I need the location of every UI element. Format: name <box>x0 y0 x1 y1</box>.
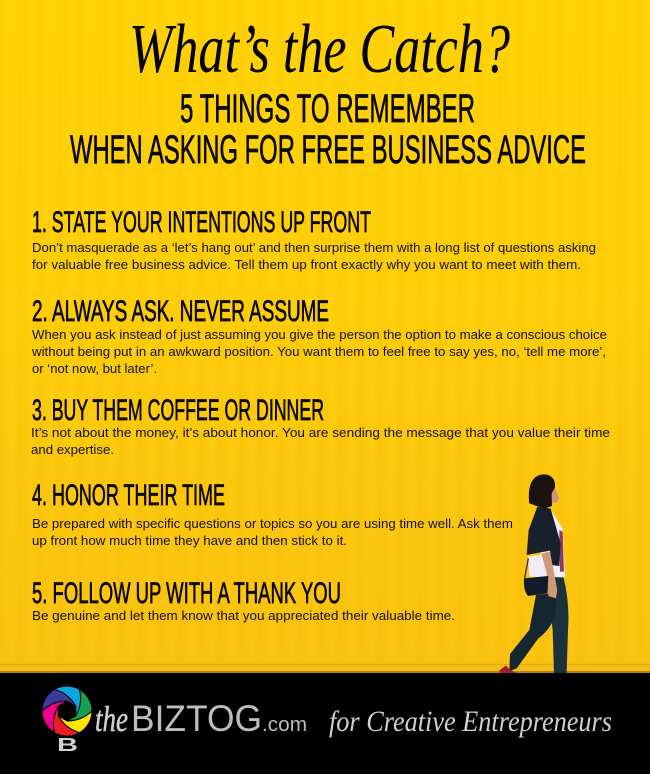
tip 3: and expertise. <box>31 442 114 457</box>
tip 1: 1. STATE YOUR INTENTIONS UP FRONT <box>32 206 371 239</box>
brand name: BIZTOG <box>131 698 262 739</box>
subtitle <box>70 87 586 172</box>
woman walking photo <box>499 474 568 673</box>
tip 1: for valuable free business advice. Tell them up front exactly why you want to meet with them. <box>32 257 581 272</box>
tip 2: 2. ALWAYS ASK. NEVER ASSUME <box>32 295 329 328</box>
tip 1 <box>32 206 596 272</box>
tip 4 <box>32 479 513 548</box>
title: What’s the Catch? <box>129 11 510 88</box>
tip 4: up front how much time they have and then stick to it. <box>32 533 347 548</box>
tip 1: Don’t masquerade as a ‘let’s hang out’ and then surprise them with a long list of questions asking <box>32 240 596 255</box>
tip 4: Be prepared with specific questions or topics so you are using time well. Ask them <box>32 516 513 531</box>
brand name: the <box>95 699 128 739</box>
tip 2: without being put in an awkward position. You want them to feel free to say yes, no, ‘tell me more’, <box>31 344 606 359</box>
tip 5: 5. FOLLOW UP WITH A THANK YOU <box>32 577 341 610</box>
tip 5 <box>32 577 455 623</box>
tagline: for Creative Entrepreneurs <box>329 705 612 738</box>
tip 3 <box>31 394 610 457</box>
footer band <box>0 673 650 774</box>
brand name: .com <box>262 714 307 736</box>
logo letter B: B <box>57 735 78 755</box>
tip 2: or ‘not now, but later’. <box>32 361 157 376</box>
tip 2 <box>31 295 607 376</box>
logo aperture icon <box>39 686 95 736</box>
tip 2: When you ask instead of just assuming you give the person the option to make a conscious choice <box>32 327 607 342</box>
tip 3: It’s not about the money, it’s about honor. You are sending the message that you value their time <box>31 425 610 440</box>
tip 3: 3. BUY THEM COFFEE OR DINNER <box>32 394 324 427</box>
tip 5: Be genuine and let them know that you appreciated their valuable time. <box>32 608 455 623</box>
brand name <box>95 698 307 739</box>
tip 4: 4. HONOR THEIR TIME <box>32 479 225 512</box>
ledge at bottom of wall <box>0 662 650 673</box>
